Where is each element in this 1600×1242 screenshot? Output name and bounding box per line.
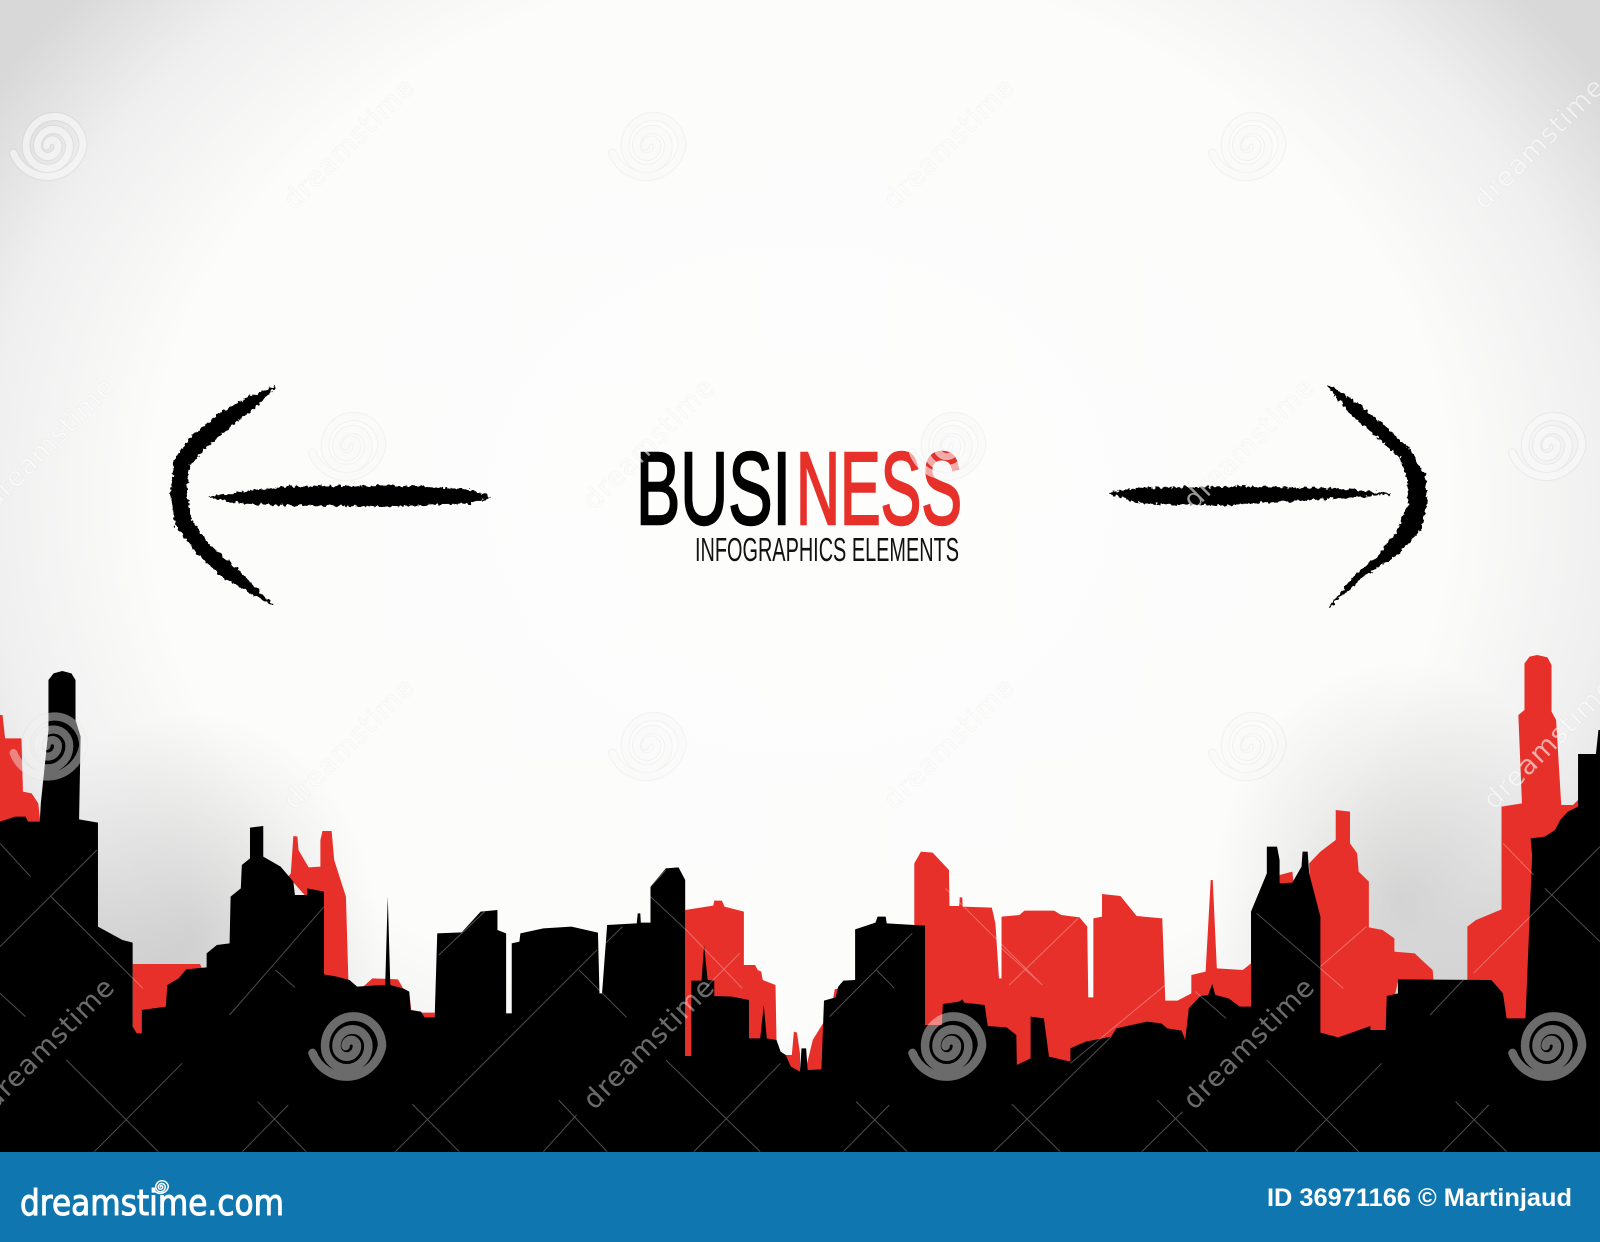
arrow: left <box>171 387 491 605</box>
skyline: black front layer <box>0 671 1600 1153</box>
watermark words: upper rows <box>0 72 1600 816</box>
skyline: red back layer <box>0 655 1581 1073</box>
watermark words: upper rows: dreamstime <box>1177 372 1321 516</box>
watermark words: upper rows: dreamstime <box>277 72 421 216</box>
watermark spirals: upper rows <box>14 116 1582 776</box>
arrow: right <box>1109 385 1427 607</box>
watermark spirals: lower row <box>313 1016 1582 1076</box>
footer logo text: dreamstime.com <box>20 1183 284 1224</box>
title: BUSI <box>636 431 791 546</box>
watermark words: upper rows: dreamstime <box>277 672 421 816</box>
watermark words: upper rows: dreamstime <box>877 672 1021 816</box>
icon: footer logo spiral <box>153 1181 168 1193</box>
subtitle: INFOGRAPHICS ELEMENTS <box>695 531 959 568</box>
footer image credit: ID 36971166 © Martinjaud <box>1267 1184 1572 1212</box>
title: NESS <box>796 431 962 546</box>
footer band <box>0 1152 1600 1242</box>
watermark words: lower row: dreamstime <box>577 972 721 1116</box>
watermark words: upper rows: dreamstime <box>577 372 721 516</box>
watermark words: lower row: dreamstime <box>1177 972 1321 1116</box>
watermark words: lower row <box>0 972 1321 1116</box>
watermark words: upper rows: dreamstime <box>877 72 1021 216</box>
